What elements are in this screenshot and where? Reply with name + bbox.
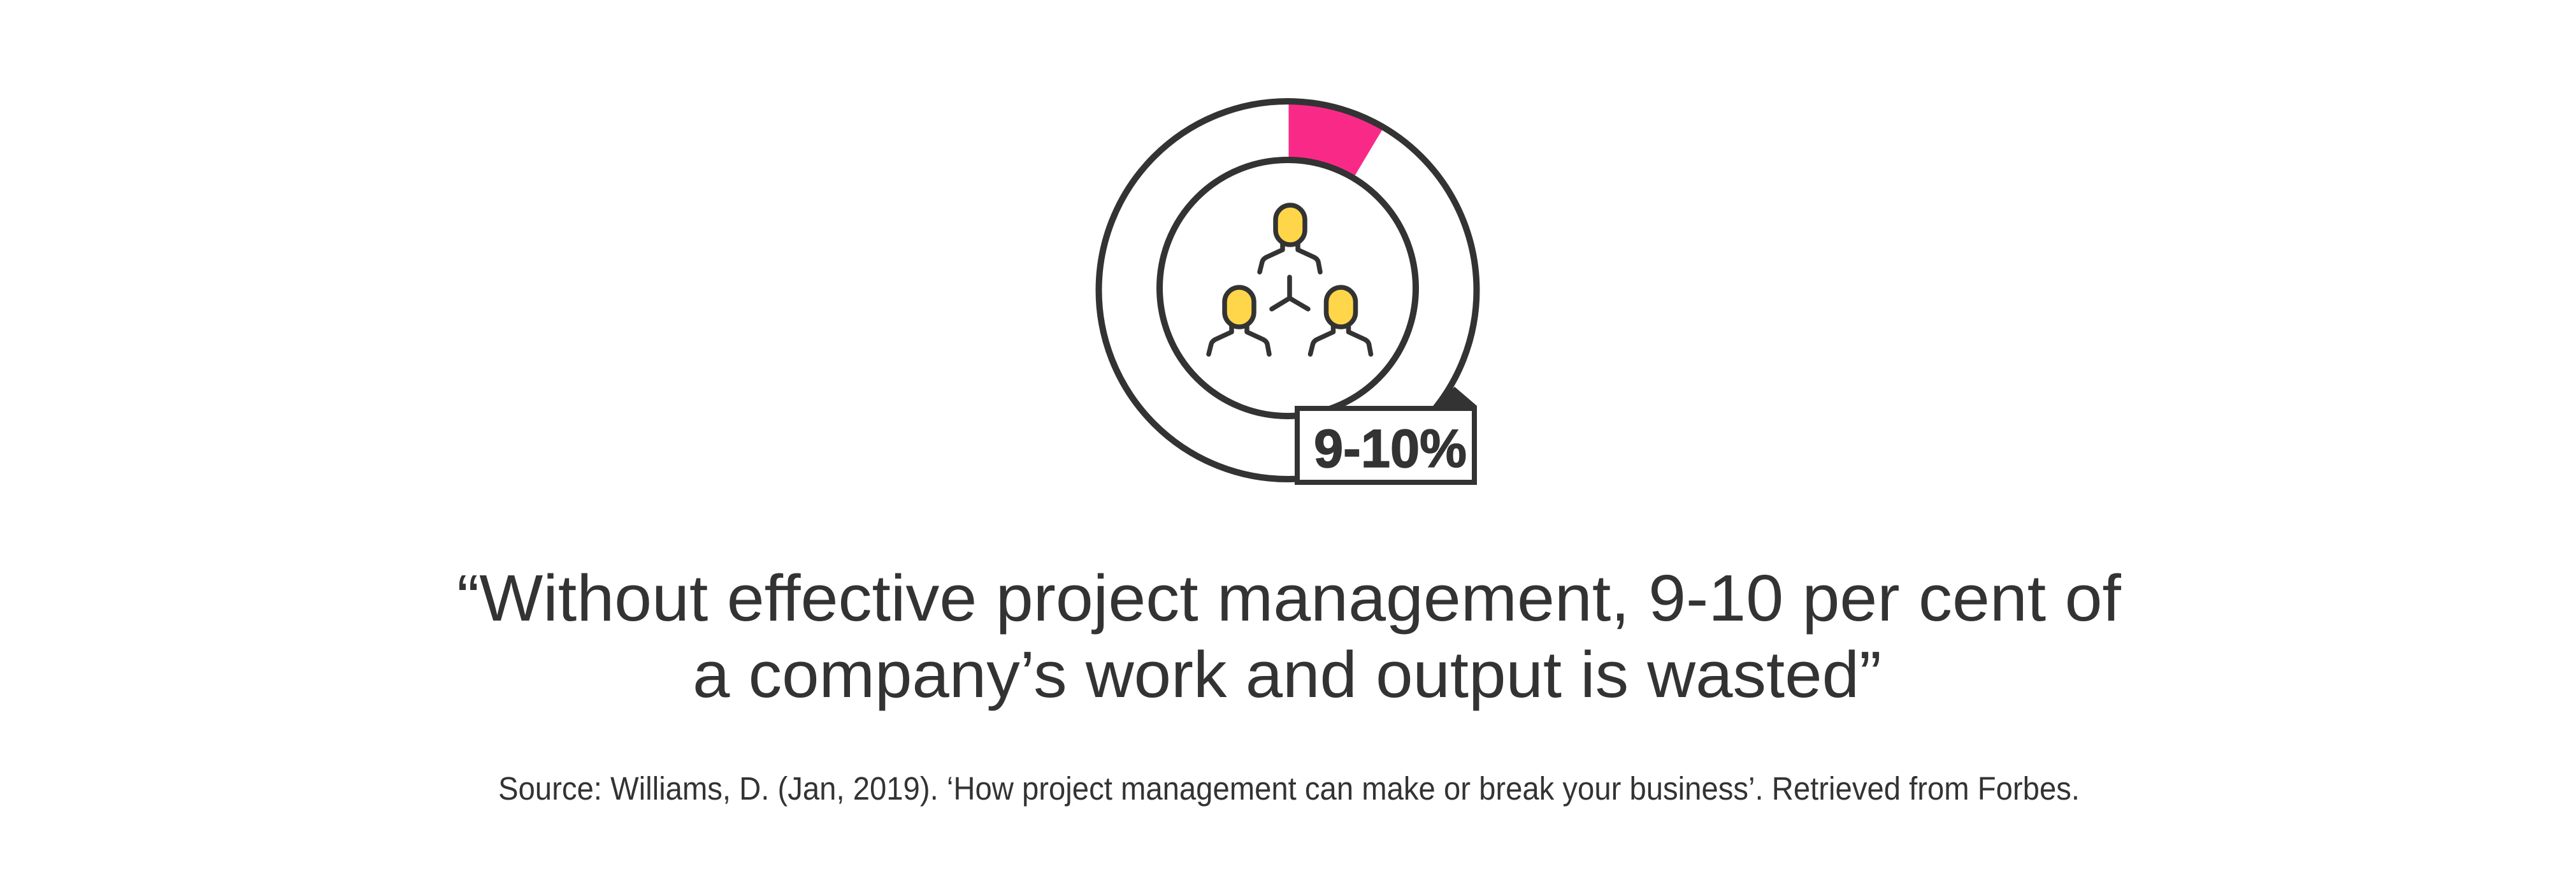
callout pointer: [1434, 387, 1477, 407]
quote line 2: a company’s work and output is wasted”: [693, 638, 1882, 711]
outer ring: [1098, 101, 1477, 479]
quote line 1: “Without effective project management, 9-10 per cent of: [457, 561, 2121, 635]
callout value: 9-10%: [1314, 419, 1467, 478]
icon: right person: [1310, 287, 1371, 354]
icon: three-way connector: [1272, 277, 1308, 309]
icon: left person: [1209, 287, 1269, 354]
icon: top person: [1260, 205, 1320, 272]
icon: team of three people: [1209, 205, 1371, 354]
donut chart: 9-10%: [1098, 101, 1477, 482]
callout box: [1297, 408, 1474, 482]
pink segment: [1288, 101, 1383, 177]
source citation: Source: Williams, D. (Jan, 2019). ‘How project management can make or break your business’. Retrieved from Forbes.: [498, 770, 2080, 807]
callout: 9-10% label: [1297, 387, 1477, 482]
inner circle: [1160, 160, 1416, 416]
quote heading: [457, 561, 2121, 711]
